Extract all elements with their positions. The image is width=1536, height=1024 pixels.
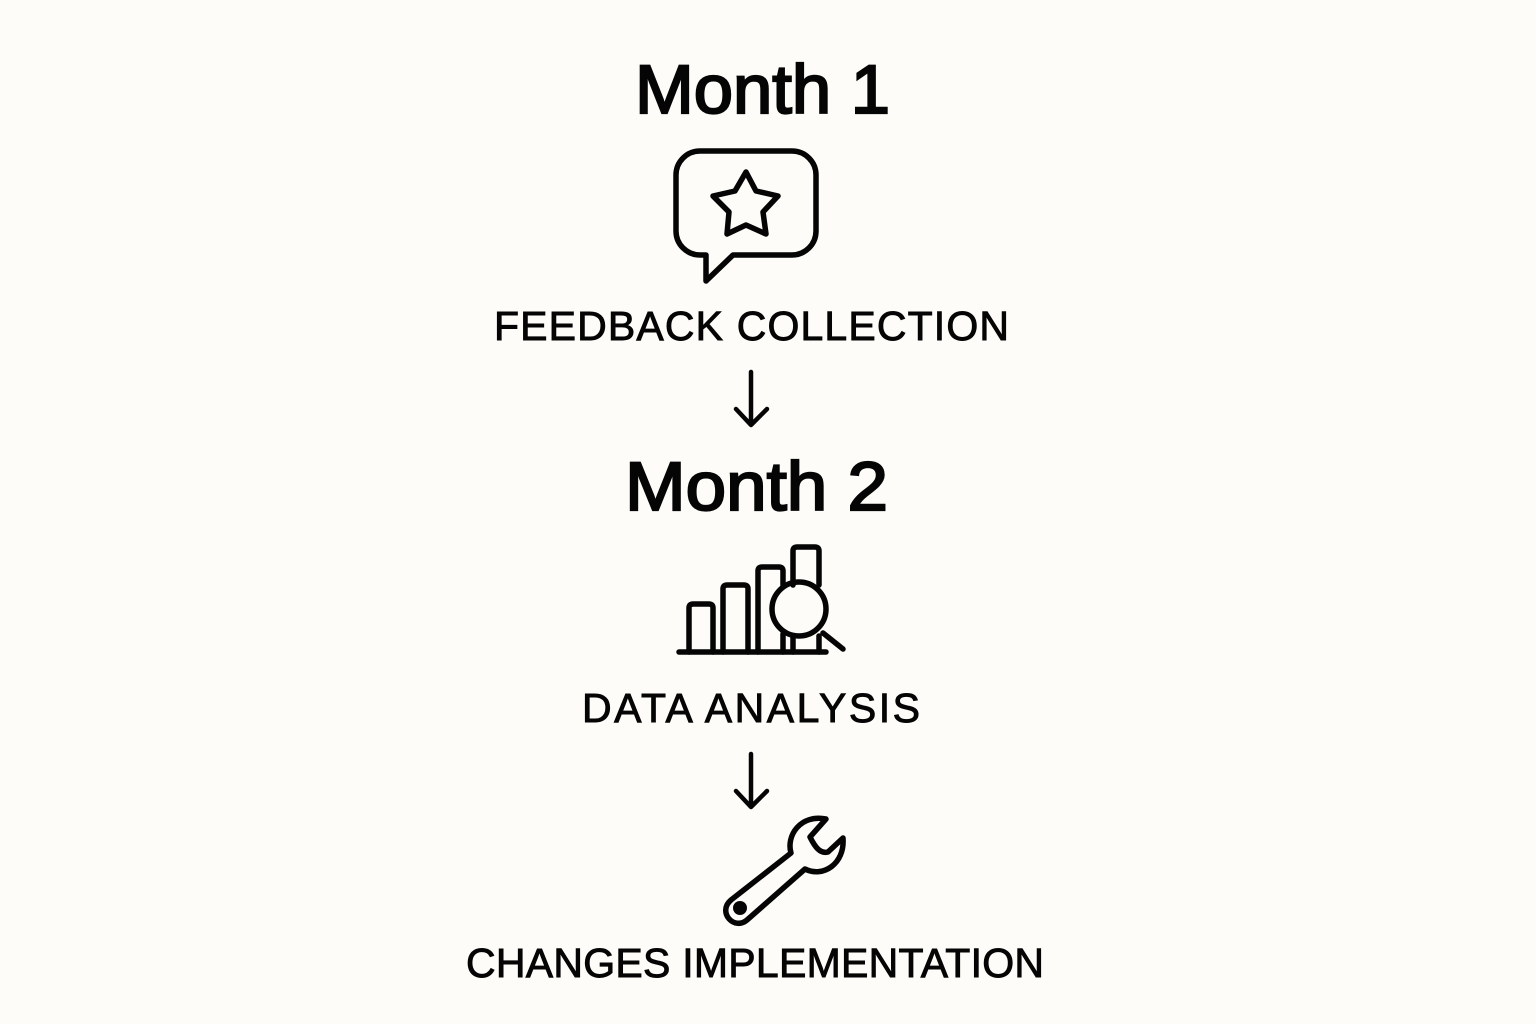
label: Data analysis: DATA ANALYSIS (582, 685, 920, 731)
arrow: Data analysis to Changes implementation (736, 754, 767, 807)
heading: Month 2: Month 2 (625, 448, 888, 525)
arrow: Month 1 to Month 2 (736, 372, 767, 425)
label: Feedback collection: FEEDBACK COLLECTION (494, 303, 1009, 349)
icon: speech bubble with star (676, 151, 816, 281)
icon: wrench (726, 818, 843, 923)
label: Changes implementation: CHANGES IMPLEMENTATION (466, 940, 1044, 986)
heading: Month 1: Month 1 (635, 51, 890, 128)
icon: bar chart with magnifier (679, 547, 843, 652)
